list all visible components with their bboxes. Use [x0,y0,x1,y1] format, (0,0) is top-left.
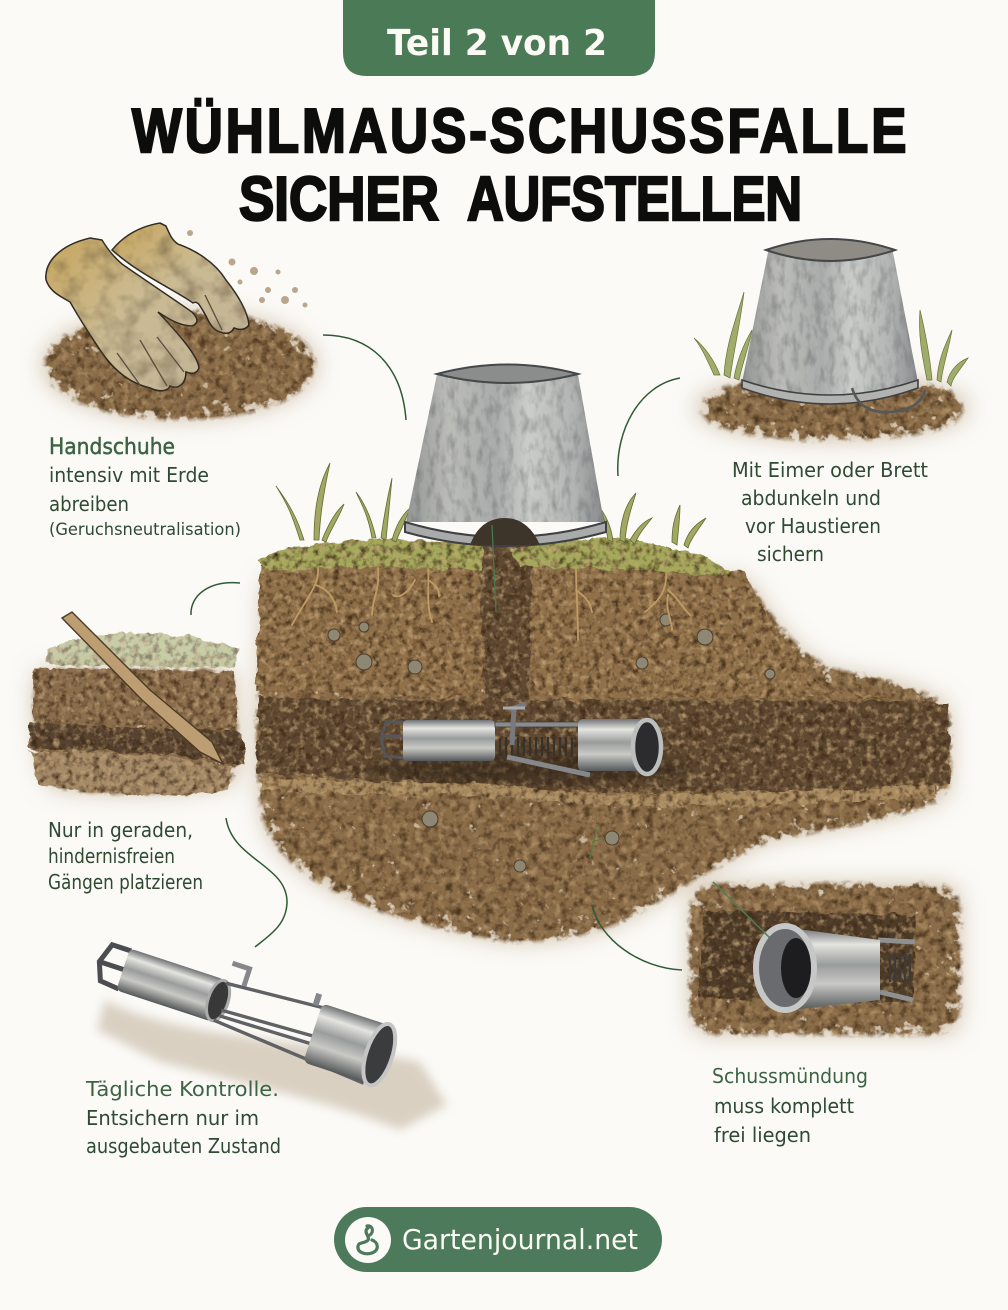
moss right [512,538,730,576]
dirt scatter [187,230,308,308]
title: AUFSTELLEN [467,165,802,234]
text block: daily check: ausgebauten Zustand [86,1134,281,1158]
arrow: soil to muzzle [592,905,682,970]
soil [36,672,236,791]
text block: bucket: abdunkeln und [741,486,881,510]
arrow: centre to stake [191,583,240,615]
grass strip [46,633,238,668]
lower tunnel lip [262,783,935,800]
text block: bucket: Mit Eimer oder Brett [732,458,928,482]
back glove [112,223,249,333]
roots [292,568,690,640]
text block: bucket: vor Haustieren [745,514,881,538]
soil under gloves [45,313,315,417]
muzzle opening [756,926,814,1010]
text block: muzzle: frei liegen [714,1123,811,1147]
soil frame [692,886,958,1032]
stake [62,612,223,764]
text block: gloves: intensiv mit Erde [49,463,209,487]
footer badge [334,1207,662,1272]
text block: gloves: abreiben [49,492,129,516]
tunnel interior [698,910,915,1003]
text block: bucket [732,458,928,566]
vertical shaft [478,540,534,700]
front glove [46,238,199,391]
arrow: gloves to bucket [323,335,406,420]
left soil block [255,560,484,698]
header tab: part indicator [343,0,655,76]
grass [694,292,968,386]
ground shadow [97,1000,447,1130]
bucket body [742,252,918,397]
text block: gloves [49,435,241,540]
tunnel layer [30,722,244,765]
trap in tunnel [381,704,661,775]
text block: straight tunnels [48,818,203,894]
text block: muzzle: Schussmündung [712,1064,868,1088]
stones [328,614,775,872]
lower soil layer [30,751,232,795]
title: SICHER [239,165,439,234]
small root mark [590,828,604,858]
text block: daily check: Tägliche Kontrolle. [85,1077,279,1101]
trap shadow [370,752,690,784]
text block: bucket: sichern [757,542,824,566]
centre hairline [492,525,496,612]
text block: straight tunnels: hindernisfreien [48,844,175,868]
spring [890,954,910,982]
arrow: text to trap [226,818,287,947]
soil mound [697,378,967,438]
handle [852,388,925,412]
text block: straight tunnels: Nur in geraden, [48,818,193,842]
arrow: bucket to centre [618,378,680,476]
title [132,97,906,234]
panel: muzzle detail [692,882,958,1032]
panel: gloves [45,223,315,417]
text block: daily check [85,1077,281,1158]
grass blades [276,463,706,548]
centre bucket [405,364,606,546]
header tab: part indicator: Teil 2 von 2 [387,23,607,64]
text block: daily check: Entsichern nur im [86,1106,259,1130]
finger lines [117,295,222,386]
upper soil layer [33,668,238,728]
panel: stake in tunnel [30,612,244,795]
pointer [713,882,770,938]
text block: gloves: (Geruchsneutralisation) [49,520,241,540]
soil mass [259,580,948,939]
tube [790,928,880,1010]
tunnel band [258,697,950,792]
panel: trap on ground [89,924,447,1130]
text block: muzzle [712,1064,868,1147]
text block: muzzle: muss komplett [714,1094,854,1118]
icon: sprout logo [345,1217,391,1263]
text block: straight tunnels: Gängen platzieren [48,870,203,894]
title: WÜHLMAUS-SCHUSSFALLE [132,97,906,166]
trap [89,924,404,1089]
panel: bucket over soil [694,239,968,438]
illustration: soil cross-section with buried trap and bucket [255,364,950,939]
text block: gloves: Handschuhe [49,435,175,460]
right soil block [529,560,900,698]
moss left [258,539,484,572]
website name: Gartenjournal.net [402,1223,638,1256]
